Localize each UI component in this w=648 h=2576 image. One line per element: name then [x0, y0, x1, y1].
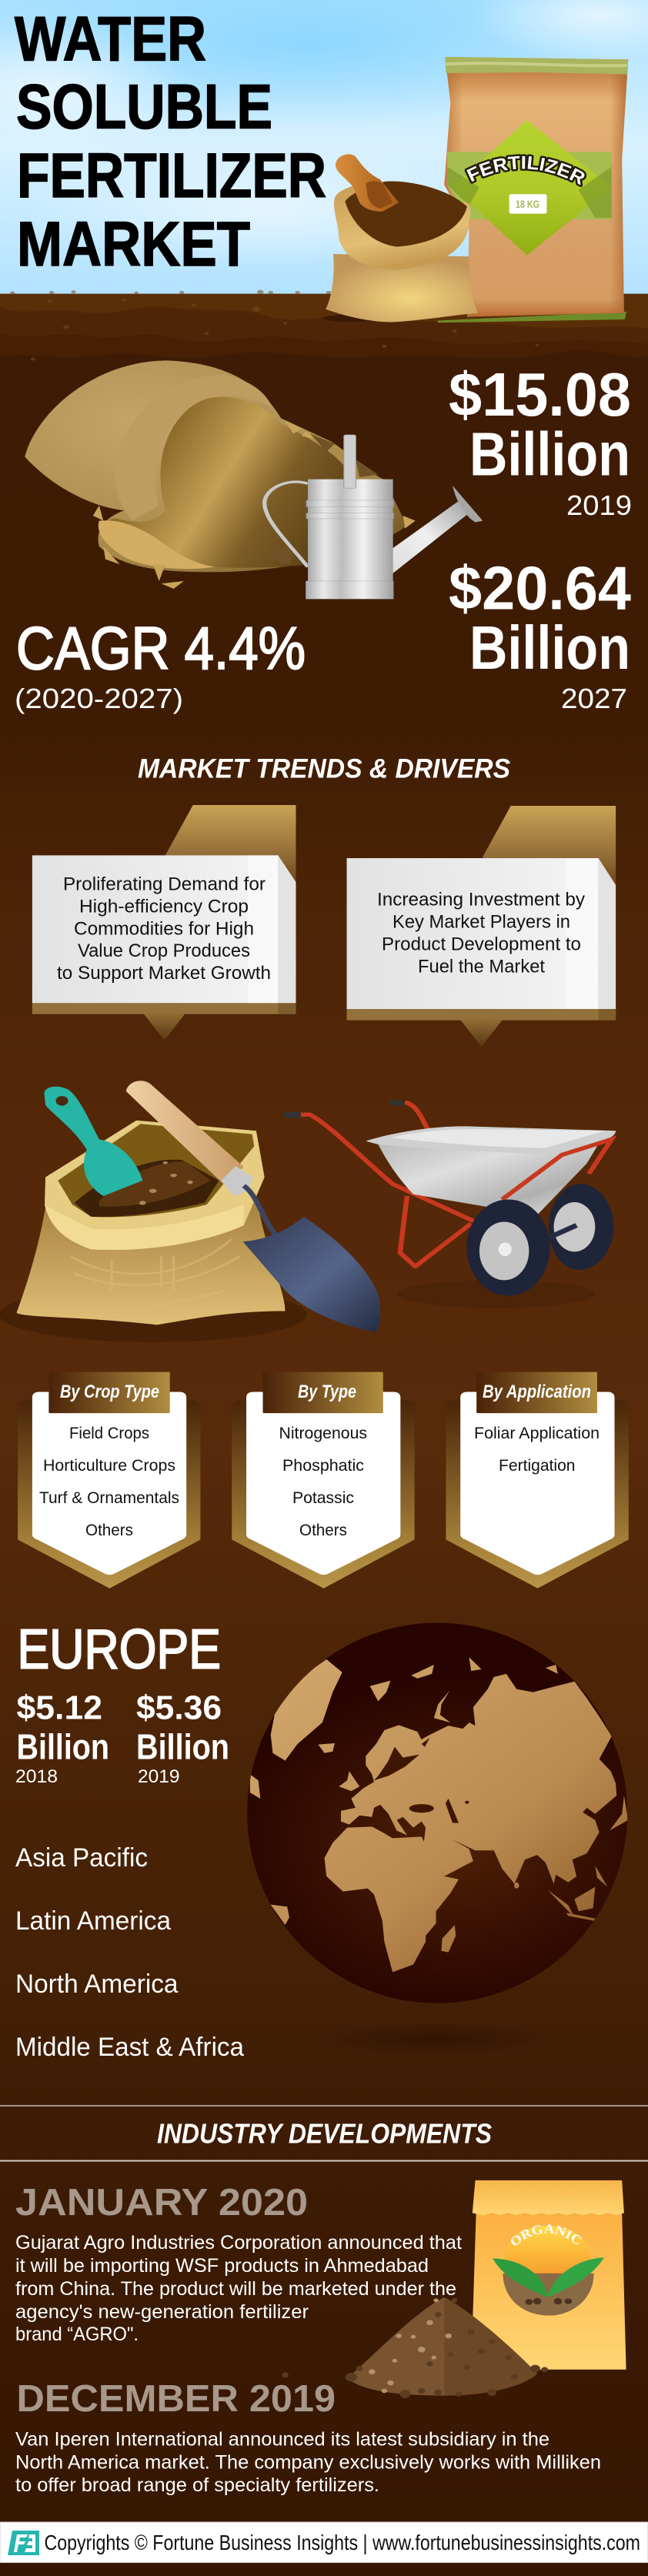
panel: driver two: [347, 806, 616, 1047]
development: December 2019: to offer broad range of specialty fertilizers.: [15, 2474, 379, 2496]
title: [15, 5, 326, 279]
stat: 2027 market value: [449, 554, 631, 714]
driver two text: Product Development to: [382, 934, 581, 954]
stat: Europe 2018: 2018: [15, 1766, 58, 1787]
icon: shovel: [126, 1081, 380, 1332]
stat: 2027 market value: $20.64: [449, 554, 631, 622]
heading: Europe: EUROPE: [17, 1619, 221, 1681]
development: January 2020: JANUARY 2020: [15, 2182, 308, 2224]
stat: Europe 2019: 2019: [138, 1766, 180, 1787]
stat: CAGR: CAGR 4.4%: [16, 614, 306, 682]
illustration: organic fertilizer bag: [473, 2180, 626, 2370]
illustration: spilled burlap sack: [25, 360, 416, 589]
stat: Europe 2019: [136, 1689, 229, 1787]
title: FERTILIZER: [17, 141, 326, 211]
driver two text: Increasing Investment by: [377, 890, 585, 910]
list: other regions: Middle East & Africa: [15, 2033, 244, 2062]
illustration: fertilizer bag: [437, 57, 628, 323]
divider lines and heading: industry developments: INDUSTRY DEVELOPMENTS: [157, 2118, 492, 2149]
crop type list: Field Crops: [69, 1425, 149, 1442]
illustration: globe: [247, 1622, 628, 2056]
development: December 2019: [15, 2378, 601, 2496]
stat: CAGR: [15, 614, 306, 714]
development: December 2019: North America market. The company exclusively works with Milliken: [15, 2452, 601, 2474]
title: WATER: [15, 5, 206, 74]
illustration: fertilizer bag: FERTILIZER: [465, 154, 586, 187]
panel: by crop type: [18, 1372, 200, 1589]
illustration: sack with scoop: [322, 154, 478, 322]
type list: Others: [299, 1522, 347, 1539]
icon: teal scoop: [44, 1087, 142, 1196]
development: January 2020: from China. The product will be marketed under the: [15, 2278, 456, 2300]
stat: Europe 2019: $5.36: [136, 1689, 222, 1727]
crop type heading: By Crop Type: [60, 1382, 159, 1402]
list: other regions: Latin America: [15, 1906, 171, 1936]
heading: market trends and drivers: MARKET TRENDS & DRIVERS: [138, 754, 510, 783]
driver one text: Commodities for High: [74, 919, 254, 939]
development: December 2019: DECEMBER 2019: [17, 2378, 336, 2420]
stat: Europe 2018: $5.12: [17, 1689, 102, 1727]
stat: Europe 2018: Billion: [17, 1727, 109, 1767]
stat: CAGR: (2020-2027): [15, 683, 183, 714]
development: January 2020: Gujarat Agro Industries Corporation announced that: [15, 2232, 462, 2254]
stat: 2019 market value: $15.08: [449, 360, 631, 429]
driver one text: Proliferating Demand for: [63, 874, 266, 894]
icon: Fortune Business Insights logo: [8, 2531, 39, 2555]
application heading: By Application: [483, 1382, 591, 1402]
panel: by type: [232, 1372, 415, 1589]
application list: [474, 1425, 600, 1475]
development: January 2020: [15, 2182, 462, 2345]
illustration: watering can: [265, 435, 483, 599]
application list: Foliar Application: [474, 1425, 600, 1442]
driver one text: [57, 874, 271, 984]
driver one text: High-efficiency Crop: [79, 896, 249, 917]
list: other regions: North America: [15, 1970, 179, 1999]
type list: Potassic: [292, 1489, 354, 1507]
type list: [279, 1425, 367, 1539]
sky: [0, 0, 648, 296]
panel: driver one: [32, 805, 296, 1041]
stat: 2019 market value: [449, 360, 632, 521]
development: January 2020: it will be importing WSF products in Ahmedabad: [15, 2255, 429, 2277]
crop type list: [39, 1425, 179, 1539]
development: January 2020: brand “AGRO".: [15, 2324, 139, 2345]
illustration: fertilizer pile: [282, 2297, 548, 2398]
crop type list: Horticulture Crops: [43, 1457, 175, 1475]
illustration: organic fertilizer bag: ORGANIC: [511, 2224, 582, 2245]
title: SOLUBLE: [16, 72, 272, 142]
illustration: fertilizer bag: 18 KG: [516, 198, 539, 210]
driver two text: Fuel the Market: [418, 956, 545, 977]
stat: 2019 market value: 2019: [566, 489, 632, 521]
driver two text: Key Market Players in: [392, 911, 570, 933]
type heading: By Type: [298, 1382, 356, 1402]
footer: [0, 2522, 648, 2563]
title: MARKET: [17, 209, 250, 279]
crop type list: Others: [85, 1522, 133, 1539]
stat: 2027 market value: 2027: [561, 683, 627, 714]
stat: Europe 2019: Billion: [136, 1727, 229, 1767]
list: other regions: Asia Pacific: [15, 1843, 148, 1873]
stat: Europe 2018: [15, 1689, 109, 1787]
driver one text: Value Crop Produces: [78, 941, 250, 961]
panel: by application: [446, 1372, 629, 1589]
type list: Phosphatic: [282, 1457, 364, 1475]
development: December 2019: Van Iperen International announced its latest subsidiary in the: [15, 2429, 549, 2451]
type list: Nitrogenous: [279, 1425, 367, 1442]
ground layers: [0, 290, 648, 387]
development: January 2020: agency's new-generation fertilizer: [15, 2301, 309, 2323]
list: other regions: [15, 1843, 244, 2062]
crop type list: Turf & Ornamentals: [39, 1489, 179, 1507]
driver one text: to Support Market Growth: [57, 963, 271, 984]
illustration: soil sack with scoop and shovel: [0, 1081, 380, 1342]
illustration: wheelbarrow: [284, 1100, 616, 1308]
driver two text: [377, 890, 585, 977]
application list: Fertigation: [499, 1457, 576, 1475]
